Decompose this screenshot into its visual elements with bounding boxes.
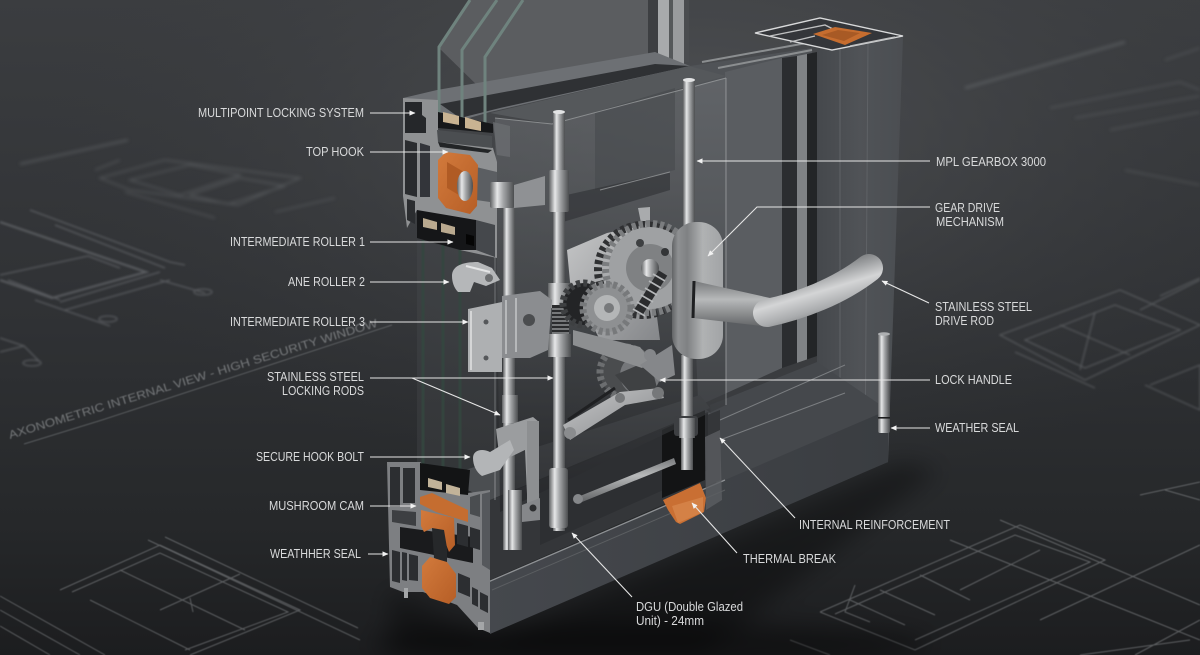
locking rod left <box>490 176 545 550</box>
callout: mpl gearbox 3000: MPL GEARBOX 3000 <box>936 154 1046 169</box>
blueprint sketch: top right <box>965 42 1200 185</box>
transparent sash glass <box>495 78 726 512</box>
callout: stainless steel drive rod: STAINLESS STEEL <box>935 299 1032 314</box>
callout: dgu double glazed unit: Unit) - 24mm <box>636 613 704 628</box>
back glazing and right window opening <box>690 48 812 450</box>
lower horizontal pin <box>573 458 676 504</box>
callout: intermediate roller 1: INTERMEDIATE ROLLER 1 <box>230 234 365 249</box>
panes above top profile <box>439 0 523 130</box>
handle lever <box>693 268 869 327</box>
roller plate <box>468 291 552 372</box>
secure hook bolt <box>473 417 540 550</box>
icon: orange mushroom cam profile <box>420 493 468 522</box>
glass panes below top section <box>423 240 460 478</box>
callout: weather seal: WEATHER SEAL <box>935 420 1019 435</box>
callout: secure hook bolt: SECURE HOOK BOLT <box>256 449 364 464</box>
callout: internal reinforcement <box>720 438 950 532</box>
callout: multipoint locking system: MULTIPOINT LOCKING SYSTEM <box>198 105 364 120</box>
callout: weather seal <box>891 420 1019 435</box>
roller hook <box>452 262 500 292</box>
post top section with orange <box>755 18 903 50</box>
callout: top hook: TOP HOOK <box>306 144 364 159</box>
gear lower dark <box>600 347 660 400</box>
callout: intermediate roller 3: INTERMEDIATE ROLLER 3 <box>230 314 365 329</box>
blueprint sketch: left plan <box>0 210 212 366</box>
blueprint sketch: right plan <box>1000 278 1200 410</box>
floor reflection <box>370 462 940 655</box>
top rail surface <box>403 52 690 132</box>
mullion <box>648 0 689 72</box>
blueprint caption: axonometric internal view: AXONOMETRIC INTERNAL VIEW - HIGH SECURITY WINDOW <box>7 318 379 442</box>
gear small rear <box>563 283 605 325</box>
blueprint sketch: top left plan <box>20 140 335 218</box>
lower glazing pocket <box>417 210 476 250</box>
bottom rail front face <box>488 410 888 634</box>
blueprint sketch: bottom right <box>790 482 1200 655</box>
locking rod centre <box>548 110 571 531</box>
mechanism backing plate <box>567 225 660 340</box>
callout: ane roller 2: ANE ROLLER 2 <box>288 274 365 289</box>
callout: stainless steel locking rods: LOCKING RODS <box>282 383 364 398</box>
locking rod right <box>674 78 698 470</box>
glazing pocket bottom <box>420 463 470 495</box>
callout: stainless steel locking rods: STAINLESS STEEL <box>267 369 364 384</box>
post right <box>817 36 903 480</box>
gear large <box>598 224 694 315</box>
bottom frame cross-section <box>387 462 490 633</box>
callout: internal reinforcement: INTERNAL REINFORCEMENT <box>799 517 950 532</box>
window assembly <box>387 0 903 634</box>
callout: dgu double glazed unit: DGU (Double Glazed <box>636 599 743 614</box>
icon: orange lower core <box>422 557 456 604</box>
sash top corner <box>493 122 510 157</box>
callout: weathher seal: WEATHHER SEAL <box>270 546 361 561</box>
callout: stainless steel drive rod: DRIVE ROD <box>935 313 994 328</box>
callout: dgu double glazed unit <box>572 533 743 628</box>
callout: stainless steel drive rod <box>882 281 1032 328</box>
callout: gear drive mechanism: MECHANISM <box>936 214 1004 229</box>
orange thermal break <box>663 483 706 524</box>
blueprint sketch: bottom left <box>0 537 360 655</box>
handle rose plate <box>672 222 723 359</box>
callout: gear drive mechanism: GEAR DRIVE <box>935 200 1000 215</box>
bottom rail inner sill <box>490 410 720 580</box>
callout: gear drive mechanism <box>708 200 1004 256</box>
lever arms <box>563 330 675 440</box>
icon: orange thermal core top <box>438 152 478 214</box>
gear small <box>583 284 631 332</box>
callout: stainless steel locking rods <box>267 369 553 415</box>
see-through area between sections <box>417 240 497 470</box>
weather seal pin <box>878 332 890 433</box>
top link to post <box>702 42 812 68</box>
upper glass panel behind <box>438 0 650 92</box>
callout: thermal break: THERMAL BREAK <box>743 551 836 566</box>
spring <box>633 273 665 316</box>
top frame cross-section <box>403 98 497 258</box>
callout: thermal break <box>692 503 836 566</box>
callout: mushroom cam: MUSHROOM CAM <box>269 498 364 513</box>
callout: lock handle: LOCK HANDLE <box>935 372 1012 387</box>
